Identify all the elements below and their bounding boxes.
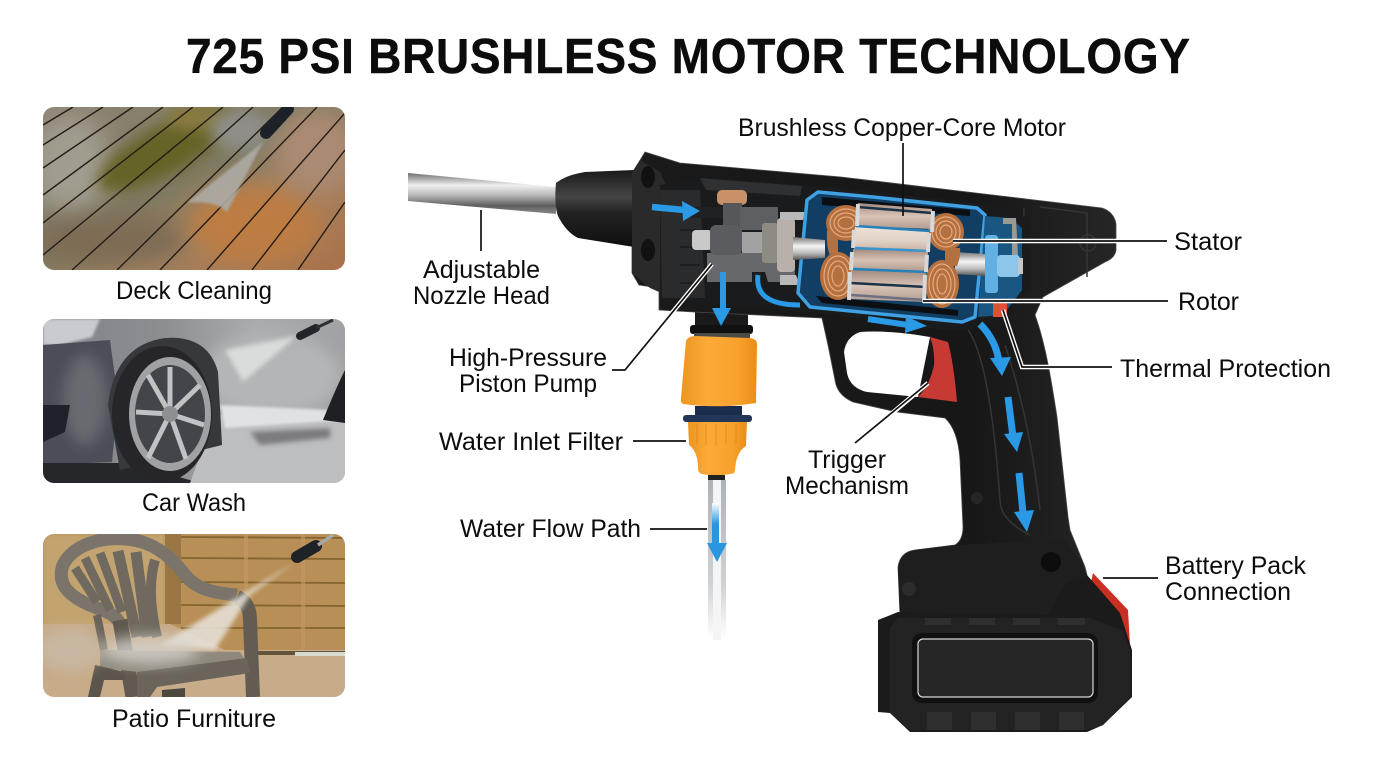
pressure washer cutaway diagram xyxy=(408,152,1132,732)
hose with water flow xyxy=(707,480,727,640)
photo: plastic chair being sprayed xyxy=(38,534,345,697)
leader: water inlet filter xyxy=(633,440,686,442)
label: trigger mechanism: Trigger xyxy=(808,446,886,474)
label: battery pack connection: Connection xyxy=(1165,578,1291,606)
label: high-pressure piston pump xyxy=(449,344,607,398)
label: adjustable nozzle head: Adjustable xyxy=(423,256,540,284)
panel: patio furniture xyxy=(38,534,345,697)
label: battery pack connection xyxy=(1165,552,1306,606)
caption: deck cleaning: Deck Cleaning xyxy=(116,277,272,305)
motor housing in blue xyxy=(798,192,985,322)
red trigger xyxy=(918,337,957,402)
black motor bands xyxy=(816,197,970,316)
caption: car wash: Car Wash xyxy=(142,489,246,517)
leader: trigger xyxy=(855,383,928,443)
label: trigger mechanism: Mechanism xyxy=(785,472,909,500)
housing collar with oval recesses xyxy=(632,160,666,295)
leader: battery pack xyxy=(1103,577,1158,579)
caption: patio furniture: Patio Furniture xyxy=(112,705,276,733)
label: battery pack connection: Battery Pack xyxy=(1165,552,1306,580)
nozzle chuck xyxy=(555,170,634,247)
copper windings xyxy=(820,205,964,308)
label: rotor: Rotor xyxy=(1178,288,1239,316)
photo: deck being pressure washed xyxy=(43,107,345,270)
main housing and handle xyxy=(632,152,1116,615)
pump assembly xyxy=(690,190,805,285)
battery mount xyxy=(898,492,1087,615)
water flow arrows in housing xyxy=(652,201,1034,532)
leader: water flow path xyxy=(650,528,707,530)
label: high-pressure piston pump: High-Pressure xyxy=(449,344,607,372)
label: brushless copper-core motor: Brushless Copper-Core Motor xyxy=(738,114,1066,142)
label: adjustable nozzle head xyxy=(413,256,550,310)
label: adjustable nozzle head: Nozzle Head xyxy=(413,282,550,310)
leader: stator xyxy=(953,239,1167,243)
pump bay xyxy=(660,178,802,298)
battery label plate xyxy=(918,639,1093,697)
orange water inlet connector xyxy=(681,308,757,480)
photo: car covered in foam xyxy=(43,319,345,483)
leader: piston pump xyxy=(612,264,712,370)
label: stator: Stator xyxy=(1174,228,1242,256)
panel: car wash xyxy=(43,319,345,483)
stator laminations xyxy=(849,203,933,303)
rear housing ribs and screw boss xyxy=(968,207,1113,535)
leader: nozzle head xyxy=(480,210,482,251)
label: thermal protection: Thermal Protection xyxy=(1120,355,1331,383)
panel: deck cleaning xyxy=(43,107,345,270)
leader: thermal protection xyxy=(1003,310,1112,367)
trigger guard opening xyxy=(844,332,930,397)
shaft rear section xyxy=(955,252,985,276)
leader: rotor xyxy=(923,299,1168,303)
motor shaft xyxy=(793,237,825,260)
nozzle rod xyxy=(408,173,556,214)
label: water flow path: Water Flow Path xyxy=(460,515,641,543)
end bearing inset xyxy=(978,216,1023,317)
label: high-pressure piston pump: Piston Pump xyxy=(459,370,597,398)
label: trigger mechanism xyxy=(785,446,909,500)
battery pack xyxy=(878,573,1132,732)
thermal protection sensor xyxy=(993,303,1007,317)
leader: brushless motor xyxy=(902,143,904,216)
label: water inlet filter: Water Inlet Filter xyxy=(439,428,623,456)
title: 725 PSI BRUSHLESS MOTOR TECHNOLOGY xyxy=(186,30,1190,84)
cutaway interior xyxy=(660,178,1030,332)
